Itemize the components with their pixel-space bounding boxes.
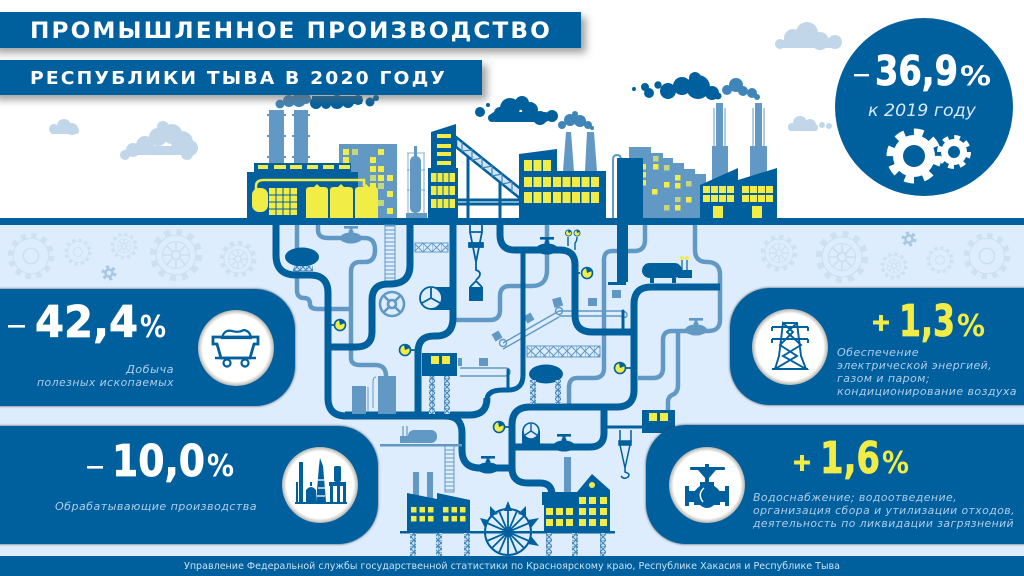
ground strip xyxy=(0,218,1024,225)
column tower xyxy=(406,146,427,218)
stepped light building xyxy=(629,147,706,218)
conveyor boxes xyxy=(458,290,621,366)
crane hook upper xyxy=(469,225,483,301)
background band xyxy=(0,225,1024,576)
panel: water: % xyxy=(882,446,909,481)
smoke left under title xyxy=(276,93,379,109)
panel: energy: газом и паром; xyxy=(837,373,930,385)
panel: mining xyxy=(0,289,295,406)
panel: mining: Добыча xyxy=(125,364,174,376)
panel: manufacturing: Обрабатывающие производства xyxy=(55,501,257,513)
platform xyxy=(400,531,615,534)
decorative gears right xyxy=(763,234,1007,279)
footer: Управление Федеральной службы государственной статистики по Красноярскому краю, Республике Хакасия и Республике Тыва xyxy=(184,561,840,572)
light building left xyxy=(339,144,397,218)
tank on chimney xyxy=(608,225,628,285)
tanks lower xyxy=(352,376,396,414)
cistern right xyxy=(642,256,692,283)
tall chimneys right xyxy=(712,103,767,188)
headline circle xyxy=(835,18,1013,196)
factory two xyxy=(519,132,606,218)
ladder lower xyxy=(445,446,454,492)
panel: water: организация сбора и утилизации отходов, xyxy=(753,505,1015,517)
panel: manufacturing: % xyxy=(207,449,234,484)
turbine xyxy=(420,287,453,310)
icon: ore cart xyxy=(198,310,274,386)
headline circle: 36,9 xyxy=(875,47,958,95)
crane hook lower xyxy=(619,430,631,478)
lower platform with tank xyxy=(380,426,462,446)
title bar 1: ПРОМЫШЛЕННОЕ ПРОИЗВОДСТВО xyxy=(30,19,552,44)
panel: energy xyxy=(730,288,1024,405)
panel: water: 1,6 xyxy=(820,433,880,484)
dark column xyxy=(613,155,643,218)
footer xyxy=(0,556,1024,576)
tank centre right xyxy=(529,364,563,404)
control box centre xyxy=(422,353,457,376)
icon: refinery xyxy=(282,447,358,523)
dark valves xyxy=(477,237,575,474)
panel: mining: полезных ископаемых xyxy=(37,377,174,389)
lower factory right xyxy=(542,457,610,532)
lower factory left xyxy=(407,472,470,532)
light valves xyxy=(340,226,707,336)
headline circle: % xyxy=(960,61,991,92)
panel: mining: 42,4 xyxy=(35,297,138,348)
smoke centre xyxy=(475,96,594,130)
panel: energy: Обеспечение xyxy=(837,347,919,359)
panel: energy: % xyxy=(957,309,985,344)
water wheel xyxy=(480,501,539,555)
title bar 2 xyxy=(0,60,482,95)
valve wheel xyxy=(380,292,404,316)
factory one: chimneys xyxy=(267,110,310,163)
pressure gauges xyxy=(331,230,634,432)
tank left xyxy=(285,248,319,271)
panel: energy: 1,3 xyxy=(899,296,955,347)
panel: mining: % xyxy=(140,310,166,345)
turbine gauge lower xyxy=(522,423,540,447)
conveyor xyxy=(460,308,627,376)
truss supports centre xyxy=(429,376,450,414)
ladder xyxy=(385,225,395,281)
panel: manufacturing: 10,0 xyxy=(112,436,205,487)
title bar 1 xyxy=(0,12,581,48)
panel: water xyxy=(646,425,1024,544)
headline circle: к 2019 году xyxy=(868,101,977,121)
conveyor truss top xyxy=(456,137,522,218)
dark pipes xyxy=(276,225,720,495)
truss legs xyxy=(410,533,606,556)
truss upper xyxy=(415,243,448,252)
clouds xyxy=(49,22,842,160)
smoke right xyxy=(632,72,760,100)
factories right xyxy=(700,168,777,218)
title bar 2: РЕСПУБЛИКИ ТЫВА В 2020 ГОДУ xyxy=(30,69,447,89)
control box right xyxy=(642,410,675,433)
panel: water: Водоснабжение; водоотведение, xyxy=(753,492,957,504)
dark tower xyxy=(428,124,458,218)
panel: energy: кондиционирование воздуха xyxy=(837,386,1017,398)
light pipes xyxy=(297,225,720,410)
factory one body xyxy=(247,163,378,218)
panel: water: деятельность по ликвидации загрязнений xyxy=(752,518,1014,530)
icon: gate valve xyxy=(669,447,745,523)
panel: energy: электрической энергией, xyxy=(837,360,992,372)
decorative gears left xyxy=(11,233,254,278)
truss middle xyxy=(527,346,600,357)
icon: power pylon xyxy=(752,309,828,385)
dark thin pipes xyxy=(487,250,645,427)
icon: gears xyxy=(890,132,968,180)
panel: manufacturing xyxy=(0,426,378,544)
